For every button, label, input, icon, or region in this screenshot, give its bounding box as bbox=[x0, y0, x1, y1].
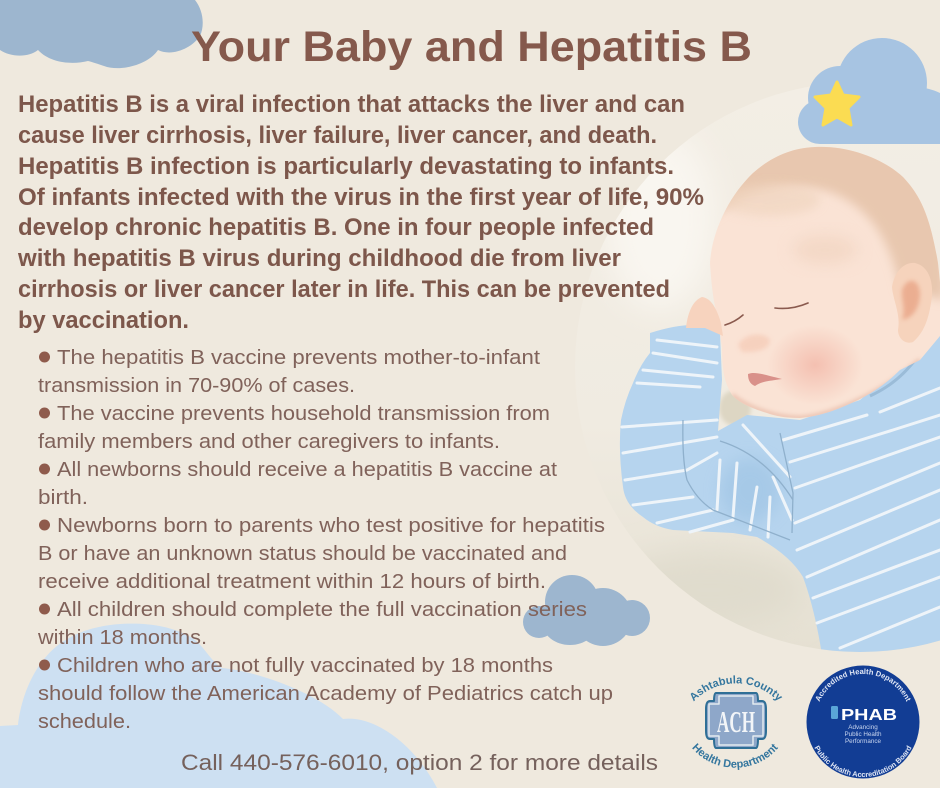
hand bbox=[686, 297, 723, 336]
logo: Ashtabula County Health Department: Ashtabula County bbox=[690, 675, 782, 702]
bullet list: vaccine facts: receive additional treatment within 12 hours of birth. bbox=[38, 571, 546, 593]
intro paragraph: develop chronic hepatitis B. One in four people infected bbox=[18, 214, 654, 241]
cheek blush bbox=[778, 334, 852, 396]
chin shadow bbox=[732, 360, 920, 418]
logo: PHAB accreditation seal bbox=[806, 666, 920, 778]
logo: Ashtabula County Health Department: Health Department bbox=[692, 743, 778, 770]
mouth bbox=[748, 373, 782, 386]
bullet list: vaccine facts: Newborns born to parents who test positive for hepatitis bbox=[57, 515, 605, 537]
logo: PHAB accreditation seal: Public Health Accreditation Board bbox=[814, 745, 912, 777]
forehead shade bbox=[798, 236, 852, 263]
nose bbox=[738, 335, 770, 352]
bullet list: vaccine facts: birth. bbox=[38, 487, 88, 509]
intro paragraph bbox=[17, 91, 704, 334]
title: Your Baby and Hepatitis B bbox=[191, 23, 752, 71]
bullet list: vaccine facts: Children who are not fully vaccinated by 18 months bbox=[57, 655, 553, 677]
bullet list: vaccine facts: All children should complete the full vaccination series bbox=[57, 599, 587, 621]
logo: PHAB accreditation seal: Advancing bbox=[848, 724, 878, 731]
bullet list: vaccine facts: All newborns should receive a hepatitis B vaccine at bbox=[57, 459, 557, 481]
ear bbox=[892, 263, 932, 343]
bullet list: vaccine facts: B or have an unknown status should be vaccinated and bbox=[38, 543, 567, 565]
logo: Ashtabula County Health Department: ACH bbox=[717, 704, 755, 739]
logo: PHAB accreditation seal: Performance bbox=[845, 738, 882, 745]
bullet list: vaccine facts: transmission in 70-90% of cases. bbox=[38, 375, 355, 397]
logo: PHAB accreditation seal: PHAB bbox=[841, 707, 897, 724]
bullet list: vaccine facts: The vaccine prevents household transmission from bbox=[57, 403, 550, 425]
intro paragraph: cirrhosis or liver cancer later in life. This can be prevented bbox=[18, 276, 670, 303]
intro paragraph: by vaccination. bbox=[18, 307, 189, 334]
intro paragraph: Hepatitis B is a viral infection that attacks the liver and can bbox=[18, 91, 685, 118]
blanket bbox=[761, 610, 821, 649]
decorative cloud: top left bbox=[0, 0, 203, 68]
decorative cloud: bottom left bbox=[0, 624, 437, 788]
decorative cloud: with star bbox=[798, 38, 940, 144]
intro paragraph: cause liver cirrhosis, liver failure, liver cancer, and death. bbox=[18, 122, 657, 149]
head and face bbox=[710, 146, 940, 418]
bullet list: vaccine facts: should follow the American Academy of Pediatrics catch up bbox=[38, 683, 613, 705]
bullet list: vaccine facts: family members and other caregivers to infants. bbox=[38, 431, 500, 453]
bullet list: vaccine facts bbox=[37, 347, 613, 733]
intro paragraph: Of infants infected with the virus in the first year of life, 90% bbox=[18, 184, 704, 211]
bullet list: vaccine facts: schedule. bbox=[38, 711, 131, 733]
closed eyes bbox=[725, 303, 808, 325]
logo: PHAB accreditation seal: Public Health bbox=[844, 731, 882, 738]
hair bbox=[725, 146, 940, 302]
logo: Ashtabula County Health Department bbox=[690, 675, 782, 770]
photo: sleeping baby in circular crop bbox=[600, 132, 940, 652]
icon: star bbox=[815, 82, 859, 125]
decorative cloud: small middle bbox=[523, 575, 650, 646]
call to action: Call 440-576-6010, option 2 for more details bbox=[181, 750, 658, 775]
babysuit bbox=[620, 325, 940, 655]
logo: PHAB accreditation seal: Accredited Health Department bbox=[816, 668, 911, 702]
intro paragraph: with hepatitis B virus during childhood die from liver bbox=[17, 245, 621, 272]
bullet list: vaccine facts: within 18 months. bbox=[37, 627, 207, 649]
intro paragraph: Hepatitis B infection is particularly devastating to infants. bbox=[18, 153, 674, 180]
bullet list: vaccine facts: The hepatitis B vaccine prevents mother-to-infant bbox=[57, 347, 540, 369]
